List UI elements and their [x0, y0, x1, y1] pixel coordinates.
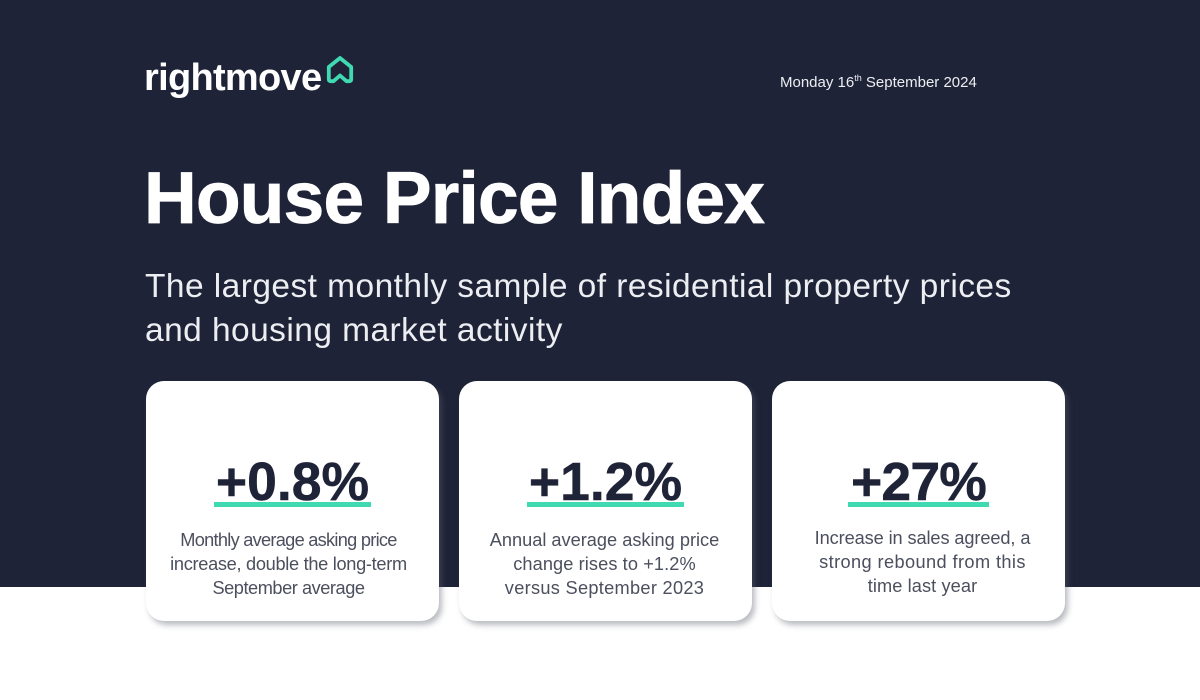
stat: +1.2%: +1.2%	[529, 453, 682, 512]
logo wordmark: rightmove	[144, 57, 321, 99]
description: Increase in sales agreed, a	[815, 528, 1030, 548]
underline	[214, 502, 371, 507]
description: increase, double the long-term	[170, 554, 407, 574]
description: time last year	[868, 576, 977, 596]
description: Monthly average asking price	[180, 530, 397, 550]
subtitle: and housing market activity	[145, 312, 563, 349]
icon: house	[326, 56, 354, 84]
description: change rises to +1.2%	[513, 554, 696, 574]
panel: annual change	[459, 381, 752, 621]
subtitle	[145, 268, 1012, 349]
description: Annual average asking price	[490, 530, 719, 550]
logo: rightmove	[144, 56, 354, 99]
underline	[527, 502, 684, 507]
stat: +0.8%: +0.8%	[216, 453, 369, 512]
date: Monday 16th September 2024	[780, 73, 977, 91]
stat: +27%: +27%	[851, 453, 986, 512]
description	[170, 530, 407, 598]
underline	[848, 502, 989, 507]
description: September average	[212, 578, 365, 598]
description	[815, 528, 1030, 596]
description: versus September 2023	[505, 578, 704, 598]
description	[490, 530, 719, 598]
panel: sales agreed	[772, 381, 1065, 621]
panel: monthly change	[146, 381, 439, 621]
title: House Price Index	[144, 158, 764, 239]
description: strong rebound from this	[819, 552, 1026, 572]
subtitle: The largest monthly sample of residential property prices	[145, 268, 1012, 305]
